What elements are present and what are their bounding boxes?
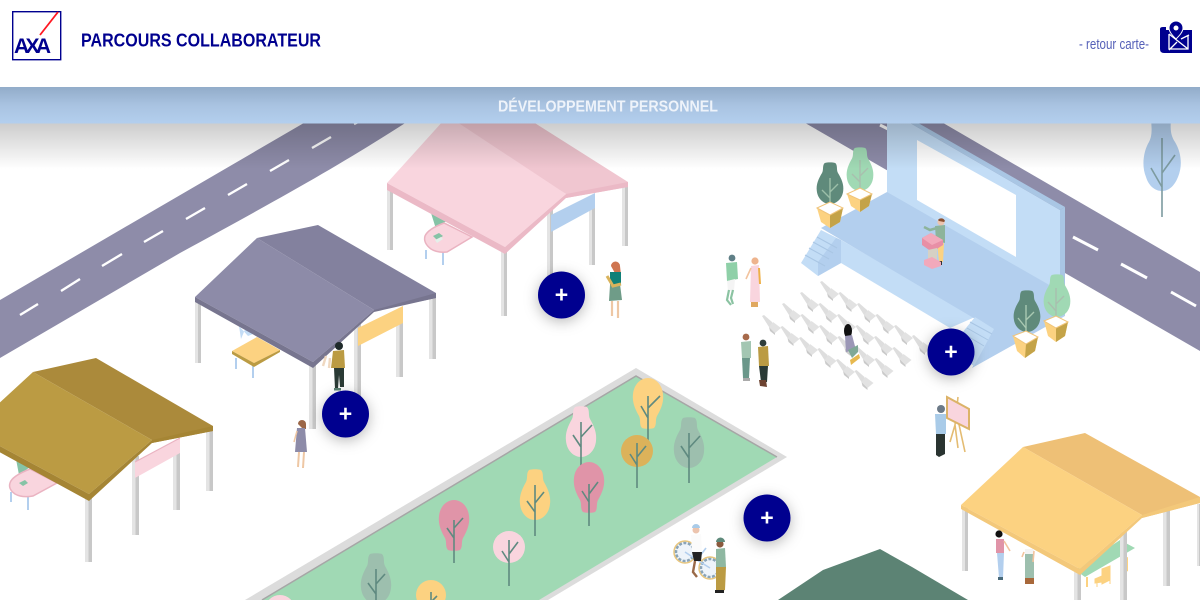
stage platform [821, 192, 1065, 368]
tree: yellow lower [416, 580, 446, 600]
tent: purple [195, 225, 436, 429]
person: woman in pink [746, 257, 760, 307]
tree: dark pink [574, 462, 604, 526]
header shadow [0, 123, 1200, 169]
person: seated woman [844, 324, 860, 365]
plant: light green back [847, 147, 873, 212]
button: plus garden [744, 494, 790, 542]
tree: light pink round [493, 531, 525, 586]
plant: dark green back [817, 162, 843, 228]
tent: dark green [778, 549, 968, 600]
tree: pink corner [265, 595, 295, 600]
stage [801, 120, 1065, 368]
road: right [800, 120, 1200, 351]
table: green with chairs [1075, 540, 1135, 587]
button: plus purple tent [322, 390, 369, 438]
banner: pink [135, 438, 180, 478]
chairs [762, 281, 931, 390]
person: man in gold coat [331, 342, 345, 390]
back wall [887, 120, 1065, 294]
person: woman in purple dress [294, 420, 307, 468]
person: woman in blue jeans [995, 530, 1010, 580]
bicycle with rider [674, 524, 721, 579]
stairs: right [948, 317, 994, 366]
tree: light pink [566, 406, 596, 472]
button: plus stage [928, 328, 974, 376]
plant: light green front [1044, 274, 1070, 342]
tent: yellow [961, 433, 1200, 600]
person: woman in green skirt [1022, 549, 1034, 584]
logo: AXA: AXA [14, 35, 51, 58]
table: pink [425, 211, 472, 265]
button: plus pink tent [538, 272, 585, 318]
person: woman with saxophone [607, 262, 622, 318]
banner: blue [551, 193, 595, 232]
lectern [922, 233, 943, 269]
logo: AXA [13, 12, 61, 60]
plant: dark green front [1013, 290, 1040, 358]
link: retour carte: - retour carte- [1079, 37, 1149, 53]
tree: sage [674, 417, 704, 483]
tree: sage lower [361, 553, 391, 600]
icon: map [1160, 21, 1192, 53]
table: yellow [232, 326, 280, 378]
person: man beside bicycle [715, 538, 726, 593]
tent: gold [0, 358, 213, 562]
band: section heading [0, 87, 1200, 124]
button: plus pink tent: + [555, 282, 568, 308]
stairs: left [801, 230, 841, 276]
button: plus garden: + [760, 504, 774, 530]
person: hidden figure behind man [323, 356, 330, 368]
tree: yellow pear [520, 469, 550, 536]
band: section heading: DÉVELOPPEMENT PERSONNEL [498, 98, 718, 116]
header background [0, 0, 1200, 87]
title: PARCOURS COLLABORATEUR [81, 30, 321, 50]
person: man left of chairs [741, 334, 751, 381]
banner: yellow [358, 306, 403, 346]
road: left [0, 120, 410, 358]
tent: pink [387, 120, 628, 316]
tree: gold round [621, 435, 653, 488]
person: man in green [726, 255, 738, 305]
tree: dark pink lower [439, 500, 469, 563]
person: speaker [924, 218, 945, 265]
tree: blue top right [1143, 120, 1181, 217]
easel [947, 397, 969, 452]
garden [245, 368, 787, 600]
person: man in mustard [758, 340, 769, 387]
person: painter [935, 405, 946, 457]
tree: yellow [633, 378, 663, 445]
table: pink rounded [10, 459, 57, 510]
button: plus stage: + [944, 338, 958, 364]
button: plus purple tent: + [339, 400, 352, 426]
